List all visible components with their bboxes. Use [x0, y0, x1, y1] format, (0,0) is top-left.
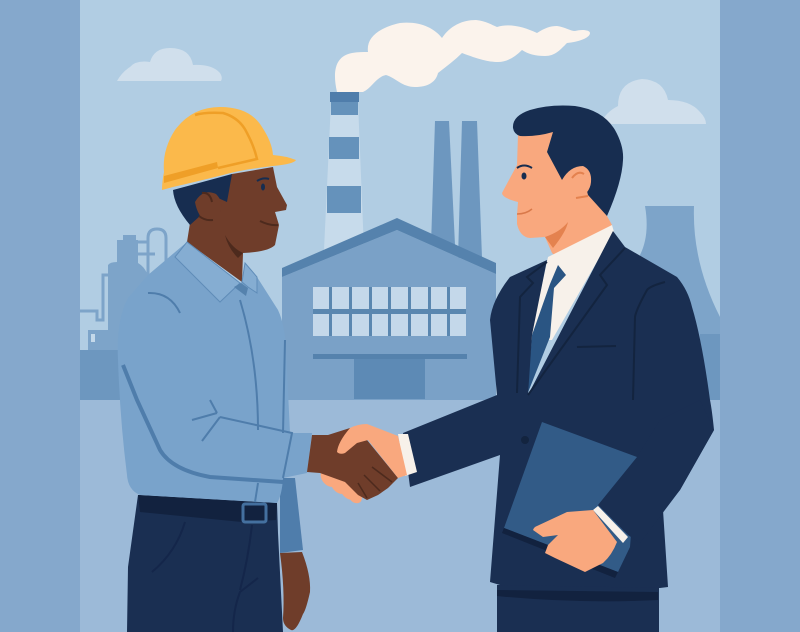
worker neck and head: [187, 167, 287, 282]
cooling tower: [640, 206, 720, 400]
cloud left: [117, 48, 222, 81]
face: [502, 125, 592, 238]
striped chimney: [324, 92, 364, 250]
face details: [517, 166, 532, 214]
sleeve cuff: [398, 434, 417, 476]
trouser creases: [152, 522, 258, 632]
smoke: [335, 20, 590, 92]
trouser waist shadow: [497, 590, 658, 601]
worker far hand: [280, 552, 310, 630]
tie: [527, 265, 566, 395]
hand holding folder: [533, 510, 617, 572]
hard hat: [162, 107, 296, 190]
worker shirt fold lines: [148, 293, 292, 502]
factory building: [282, 218, 496, 400]
worker trousers: [127, 495, 283, 632]
worker hair: [173, 174, 232, 225]
worker collar: [175, 242, 257, 302]
worker face details: [257, 178, 278, 225]
ear: [562, 166, 591, 200]
sky panel: [80, 0, 720, 400]
background towers: [431, 121, 482, 258]
worker ear: [195, 192, 221, 222]
ground: [80, 400, 720, 632]
cloud right: [600, 79, 706, 124]
refinery: [80, 229, 166, 400]
dark hand: [307, 428, 398, 500]
belt buckle: [243, 504, 266, 522]
hair: [513, 106, 623, 216]
worker shirt: [118, 242, 312, 503]
trousers: [497, 585, 659, 632]
handshake: [307, 424, 417, 506]
jacket: [403, 231, 714, 588]
businessman: [403, 106, 714, 632]
worker far sleeve: [280, 478, 303, 553]
worker sleeve shadow: [123, 365, 283, 482]
lapel lines: [517, 248, 665, 400]
folder: [504, 422, 637, 572]
worker jaw shadow: [225, 235, 243, 258]
peach hand: [337, 424, 407, 478]
worker fingers: [317, 466, 365, 506]
finger lines: [358, 467, 392, 498]
jacket button: [521, 436, 529, 444]
arm sleeve: [598, 400, 714, 543]
jaw shadow: [545, 222, 568, 248]
worker: [118, 107, 312, 632]
shirt: [530, 225, 614, 340]
factory windows: [313, 287, 466, 336]
shirt cuff at folder: [593, 506, 628, 543]
folder shadow: [502, 528, 618, 578]
neck: [545, 190, 612, 262]
worker belt: [138, 495, 277, 522]
